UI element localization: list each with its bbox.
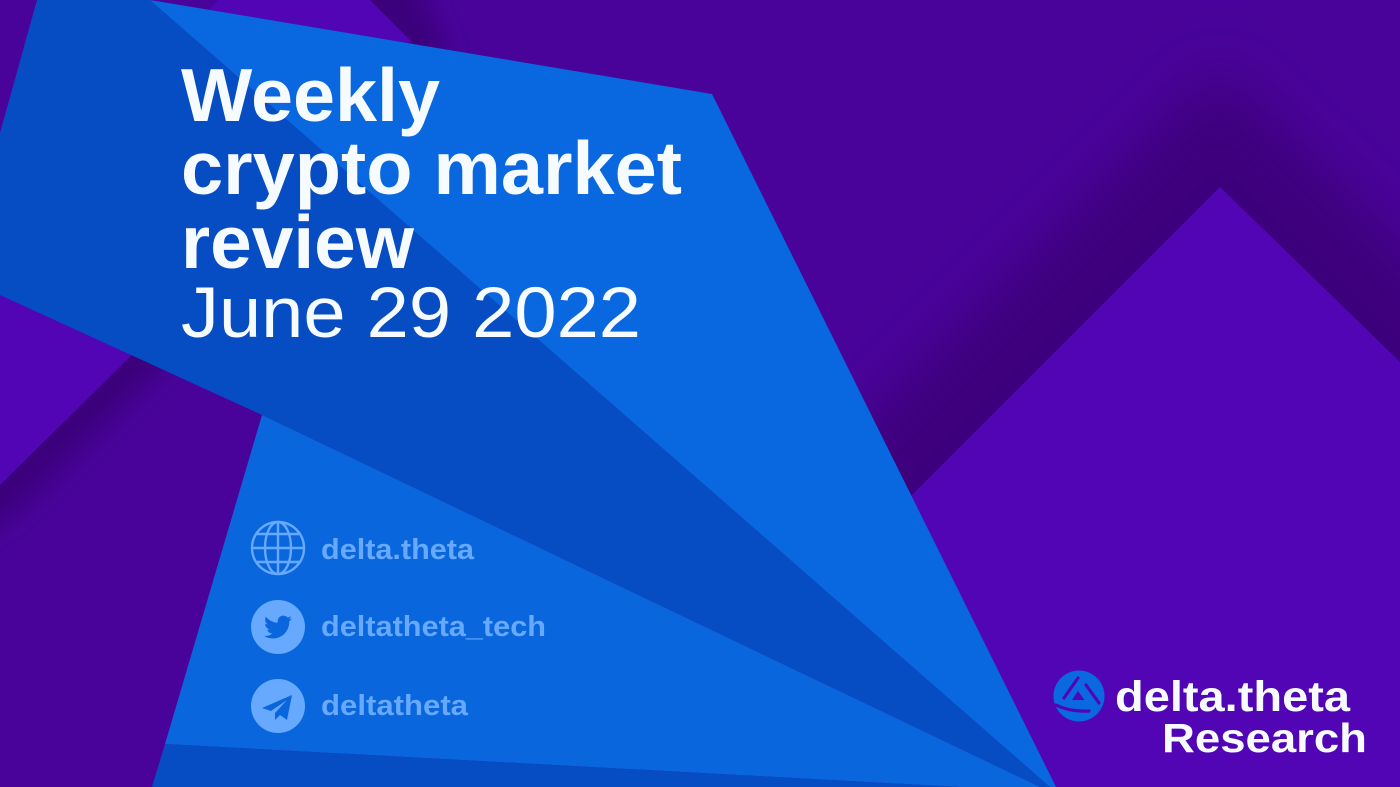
icon: globe <box>252 522 304 574</box>
brand name: delta.theta <box>1115 673 1351 721</box>
icon: telegram <box>251 679 305 733</box>
brand logo <box>1054 670 1367 761</box>
facet: right purple mountain <box>800 187 1400 787</box>
facet: left purple triangle <box>0 290 135 485</box>
facet: bottom dark blue strip <box>152 744 960 787</box>
facet: top purple wedge <box>200 0 412 60</box>
facet: lower blue panel <box>165 415 1040 787</box>
title line: crypto market: crypto market <box>181 126 682 210</box>
link text: twitter: deltatheta_tech <box>321 611 546 643</box>
link text: telegram: deltatheta <box>321 690 469 722</box>
date line: June 29 2022 <box>181 274 641 353</box>
icon: twitter <box>251 600 305 654</box>
icon: delta theta mark <box>1054 670 1104 722</box>
title line: Weekly: Weekly <box>181 53 440 137</box>
link text: website: delta.theta <box>321 534 475 566</box>
facet: dark blue main kite <box>0 0 1050 787</box>
brand subtitle: Research <box>1162 715 1367 761</box>
title line: review: review <box>181 200 415 284</box>
facet: light blue upper kite <box>150 0 1056 787</box>
title <box>181 53 682 353</box>
contact links <box>251 522 546 733</box>
